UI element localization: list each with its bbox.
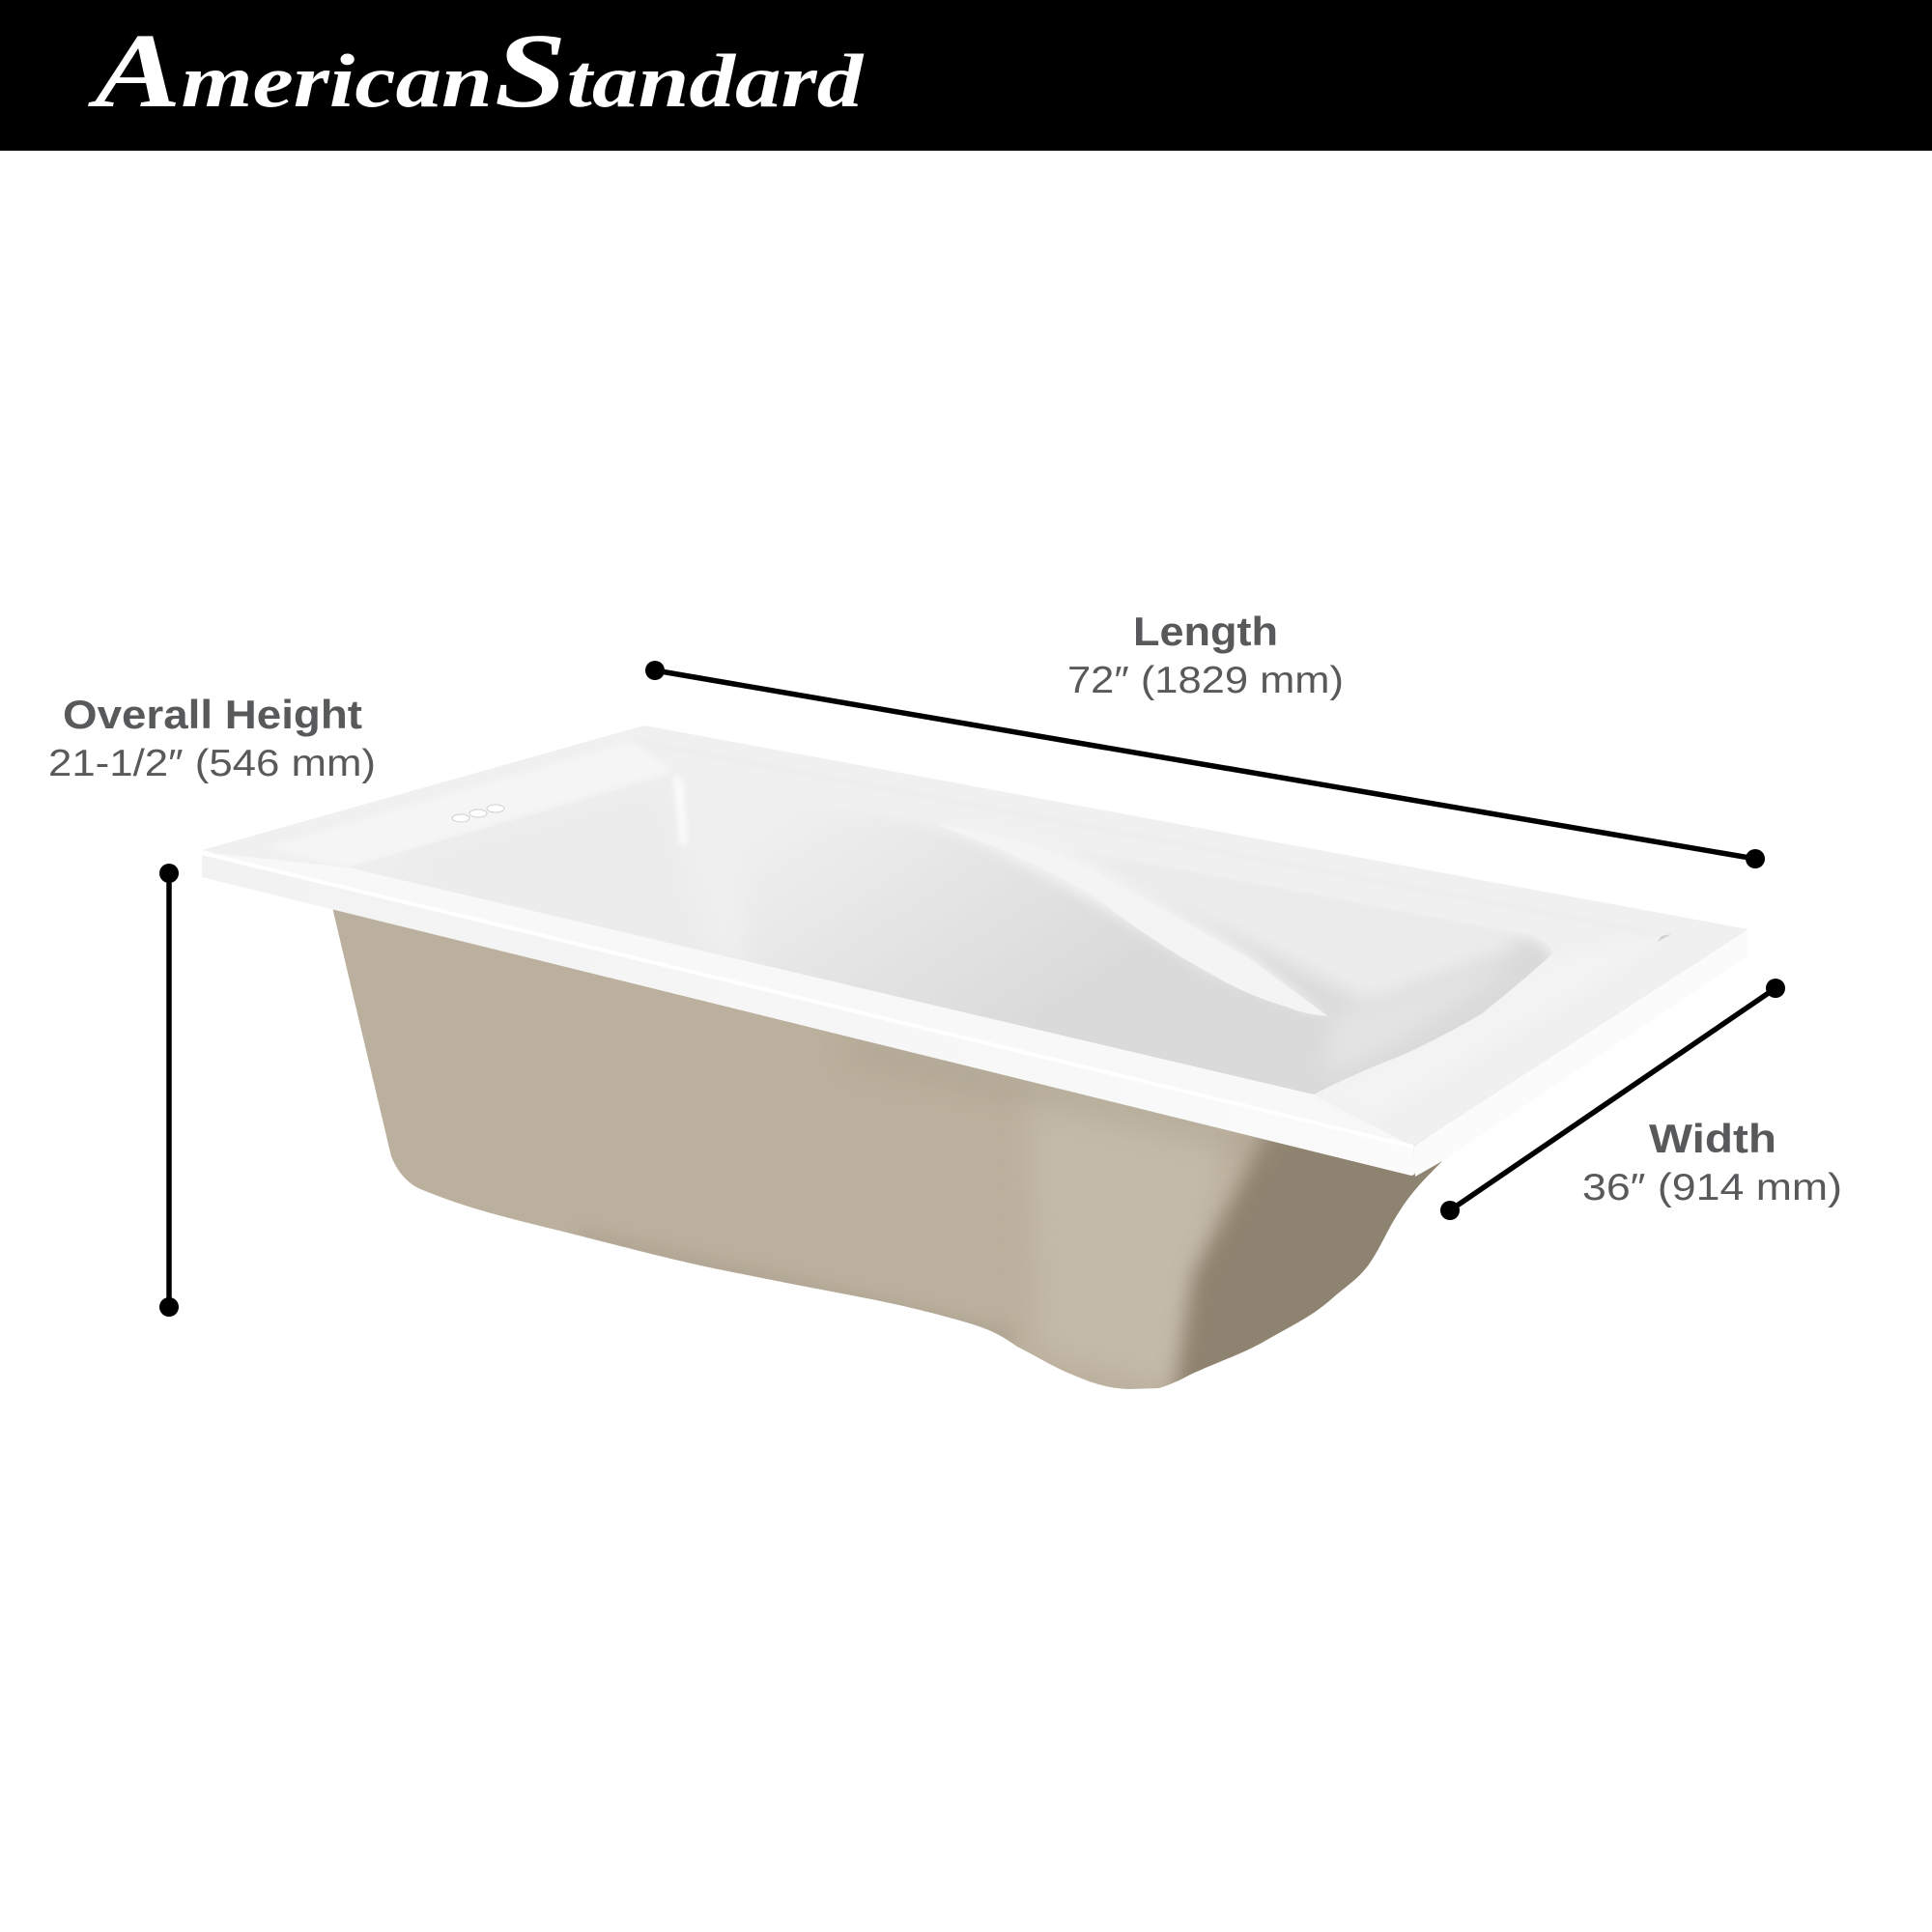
soft back and end edge of basin	[676, 771, 1555, 956]
dimension line: length	[645, 661, 1765, 868]
label: overall height	[48, 692, 376, 784]
bathtub illustration	[202, 725, 1748, 1410]
rim front flat band	[202, 852, 1413, 1147]
label: overall height: Overall Height	[63, 692, 362, 737]
label: overall height: 21-1/2″ (546 mm)	[48, 743, 376, 784]
faucet holes	[452, 805, 504, 822]
rim front highlight	[202, 853, 1413, 1147]
backrest ridge	[935, 824, 1328, 1016]
tub rim top surface	[202, 725, 1748, 1147]
label: length: 72″ (1829 mm)	[1067, 660, 1344, 701]
tub rim front face	[202, 852, 1415, 1176]
dimension line: overall height	[159, 864, 179, 1317]
rim recess	[267, 741, 1671, 1121]
basin	[677, 784, 1552, 1094]
tub outer shell	[331, 903, 1459, 1410]
dimension line: width	[1440, 979, 1785, 1220]
tub rim end face	[1413, 929, 1748, 1177]
label: length: Length	[1133, 609, 1278, 654]
label: width: 36″ (914 mm)	[1582, 1167, 1842, 1208]
label: width	[1582, 1116, 1842, 1208]
header bar with logo	[0, 0, 1932, 151]
label: width: Width	[1649, 1116, 1776, 1161]
logo: American Standard: American Standard	[87, 12, 865, 129]
label: length	[1067, 609, 1344, 701]
